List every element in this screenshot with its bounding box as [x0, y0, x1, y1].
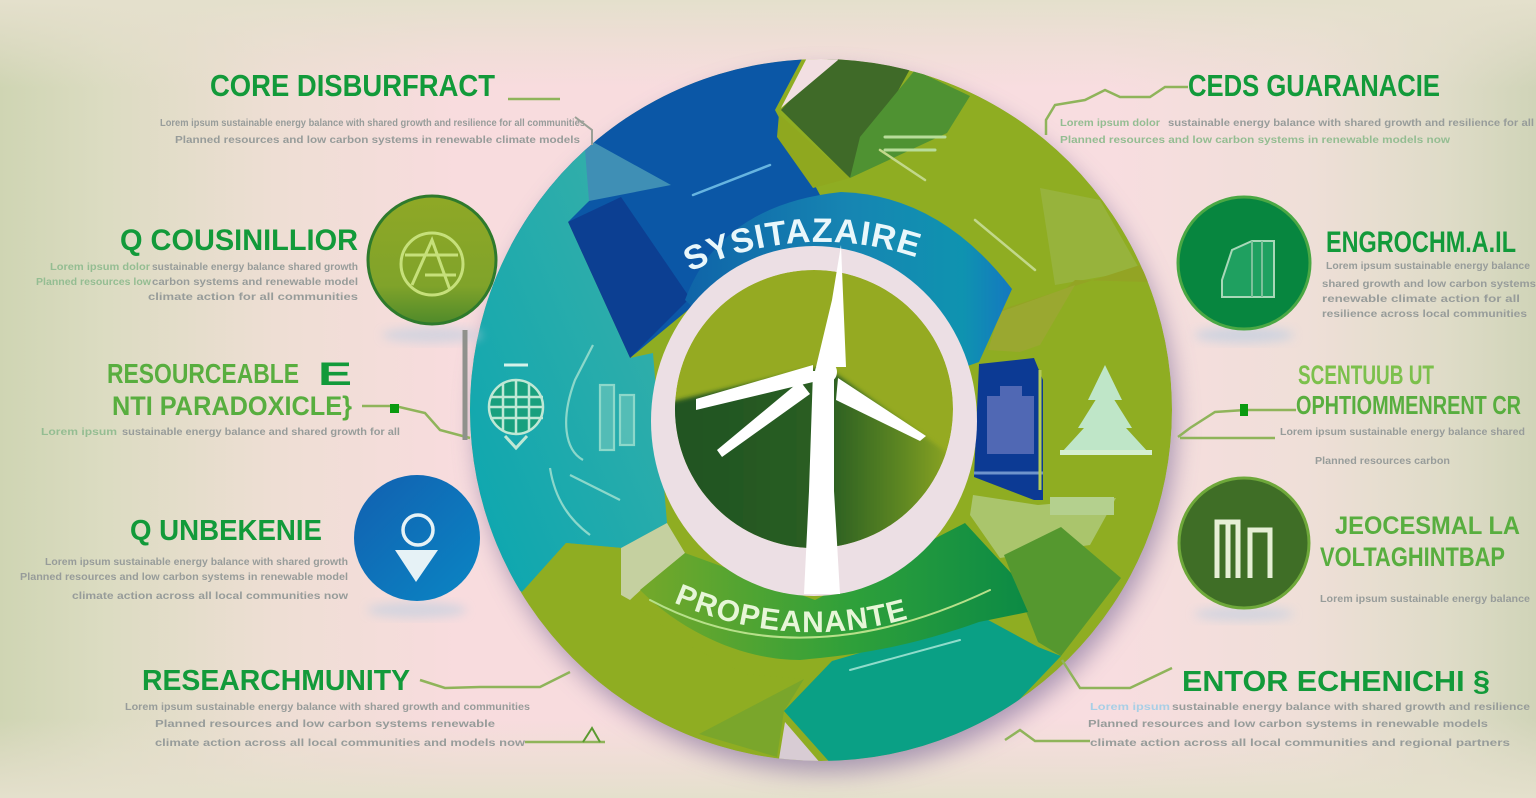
- segment: blue: [500, 40, 820, 358]
- right item 5: Lorem ipsum: [1090, 702, 1170, 713]
- right item 1: CEDS GUARANACIE: [1188, 68, 1440, 103]
- icon: gauge outlines: [550, 345, 634, 535]
- segment: olive lower left: [521, 543, 804, 758]
- right item 2: [1322, 226, 1536, 320]
- icon: tree: [1040, 365, 1152, 515]
- icon: wind turbine: [696, 245, 926, 594]
- left item 3: NTI PARADOXICLE}: [112, 391, 352, 421]
- right item 1: Lorem ipsum dolor: [1060, 118, 1160, 129]
- right item 1: [1046, 68, 1534, 146]
- band label: bottom: PROPEANANTE: [675, 584, 908, 632]
- right item 1: Planned resources and low carbon systems in renewable models now: [1060, 135, 1450, 146]
- right item 5: climate action across all local communities and regional partners: [1090, 738, 1511, 749]
- left item 5: RESEARCHMUNITY: [142, 665, 410, 697]
- right item 5: ENTOR ECHENICHI §: [1182, 666, 1490, 698]
- band label: top: SYSITAZAIRE: [684, 218, 921, 270]
- left item 1: [160, 68, 592, 146]
- detail strokes: [650, 137, 1035, 670]
- central ring diagram: [470, 40, 1176, 775]
- left item 2: climate action for all communities: [148, 292, 359, 303]
- left item 5: Planned resources and low carbon systems renewable: [155, 719, 496, 730]
- left item 2: carbon systems and renewable model: [152, 277, 358, 288]
- left item 4: Lorem ipsum sustainable energy balance with shared growth: [45, 557, 348, 568]
- inner white ring: [651, 246, 977, 596]
- right item 2: resilience across local communities: [1322, 309, 1528, 320]
- right item 4: JEOCESMAL LA: [1335, 512, 1520, 540]
- segment: teal bottom: [784, 620, 1061, 761]
- right item 3: Lorem ipsum sustainable energy balance shared: [1280, 427, 1525, 438]
- segment: olive right facets: [988, 188, 1150, 352]
- right item 1: sustainable energy balance with shared growth and resilience for all: [1168, 118, 1534, 129]
- left item 2: [36, 224, 359, 303]
- left item 4: Q UNBEKENIE: [130, 515, 322, 547]
- right item 4: Lorem ipsum sustainable energy balance: [1320, 594, 1530, 605]
- segment: teal: [470, 137, 667, 592]
- right item 5: Planned resources and low carbon systems in renewable models: [1088, 719, 1489, 730]
- segment: navy panel: [974, 358, 1043, 500]
- left item 2: Planned resources low: [36, 277, 151, 288]
- left item 2: Lorem ipsum dolor: [50, 262, 150, 273]
- right item 2: shared growth and low carbon systems: [1322, 279, 1536, 290]
- left item 3: [41, 330, 470, 440]
- circle icon: dark green bars: [1179, 478, 1309, 621]
- right item 3: [1178, 360, 1525, 467]
- right item 5: sustainable energy balance with shared growth and resilience: [1172, 702, 1531, 713]
- segment: pale patches: [621, 495, 1116, 600]
- right item 3: SCENTUUB UT: [1298, 360, 1434, 390]
- segment: green lower right: [1004, 527, 1121, 656]
- inner disc: [670, 270, 960, 560]
- segment: green band: [640, 523, 1028, 660]
- left item 3: E: [318, 356, 352, 392]
- left item 4: [20, 515, 348, 602]
- left item 2: sustainable energy balance shared growth: [152, 262, 358, 273]
- left item 5: climate action across all local communities and models now: [155, 738, 525, 749]
- circle icon: blue location pin: [354, 475, 480, 618]
- segment: top band: [685, 192, 1012, 366]
- segment: dark green top: [777, 50, 970, 188]
- right item 5: [1005, 660, 1531, 749]
- left item 2: Q COUSINILLIOR: [120, 224, 358, 257]
- left item 3: RESOURCEABLE: [107, 358, 299, 389]
- bottom notch: [779, 722, 818, 761]
- right item 2: renewable climate action for all: [1322, 294, 1520, 305]
- left item 4: climate action across all local communities now: [72, 591, 348, 602]
- right item 4: [1320, 512, 1530, 605]
- left item 4: Planned resources and low carbon systems in renewable model: [20, 572, 348, 583]
- right item 3: Planned resources carbon: [1315, 456, 1450, 467]
- icon: globe: [489, 365, 543, 448]
- circle icon: olive leaf: [368, 196, 496, 343]
- right item 2: Lorem ipsum sustainable energy balance: [1326, 261, 1530, 272]
- top notch: [781, 59, 838, 108]
- left item 5: Lorem ipsum sustainable energy balance with shared growth and communities: [125, 702, 530, 713]
- circle icon: green chart: [1178, 197, 1310, 343]
- left item 1: Lorem ipsum sustainable energy balance with shared growth and resilience for all communities: [160, 118, 585, 129]
- left item 3: Lorem ipsum: [41, 427, 117, 438]
- left item 5: [125, 665, 605, 749]
- left item 3: sustainable energy balance and shared growth for all: [122, 427, 400, 438]
- left item 1: Planned resources and low carbon systems in renewable climate models: [175, 135, 581, 146]
- left item 1: CORE DISBURFRACT: [210, 68, 495, 103]
